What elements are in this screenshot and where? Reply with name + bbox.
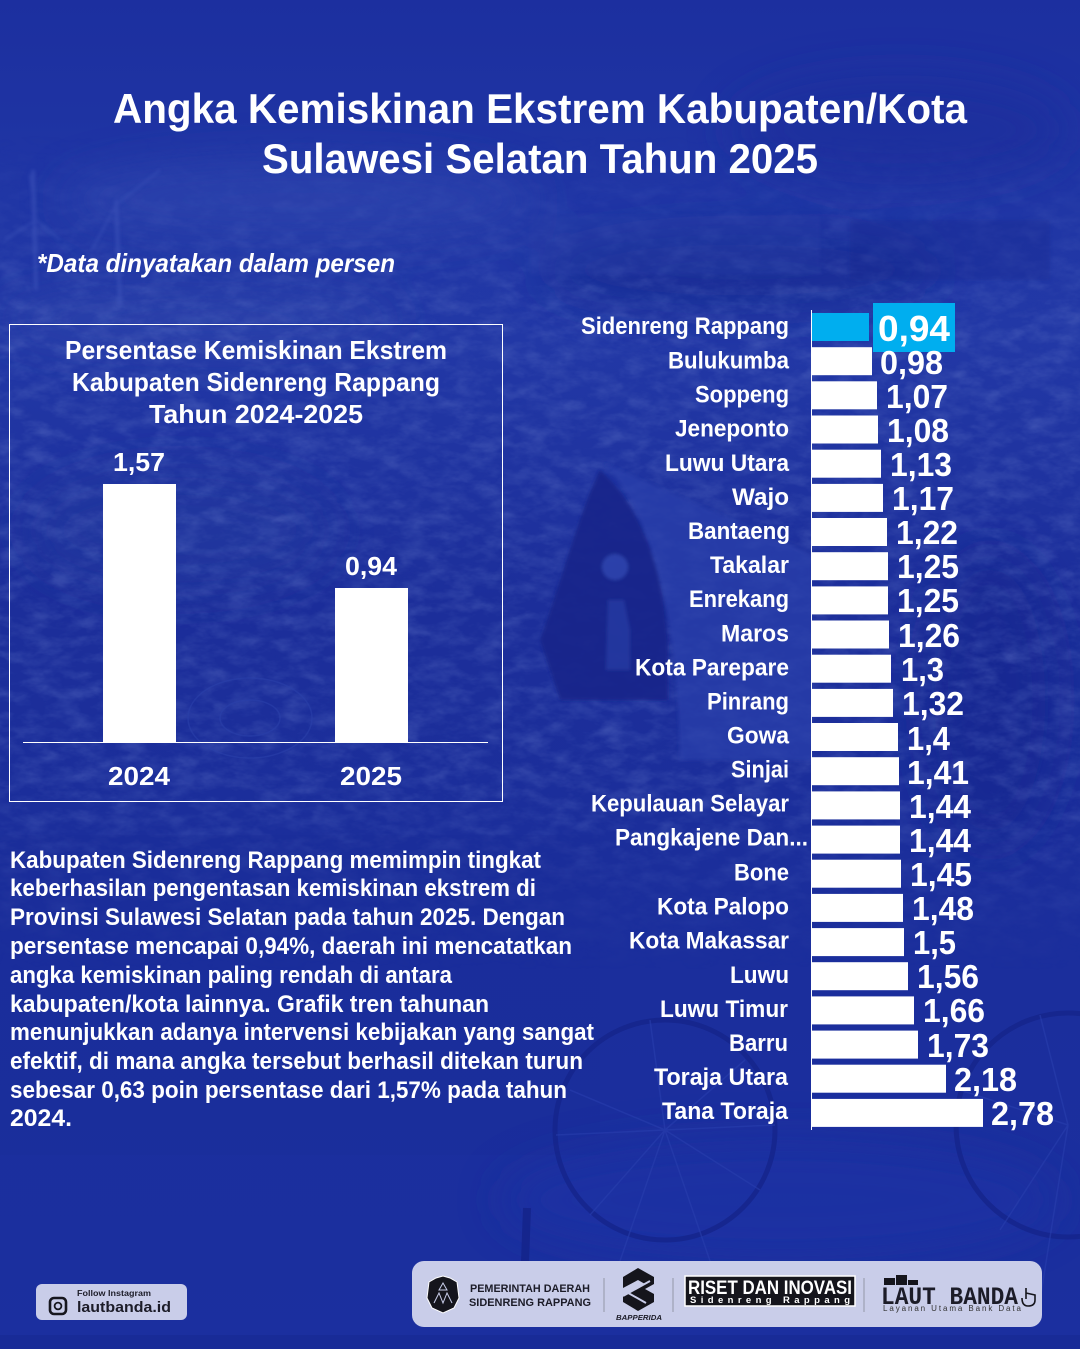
row: Gowa (727, 720, 951, 757)
logo: Pemerintah Daerah (427, 1276, 591, 1313)
bar 2024: 2024 (108, 761, 171, 791)
partner logos strip (412, 1261, 1042, 1327)
instagram badge: Follow Instagram (77, 1289, 151, 1298)
row: Luwu Utara (665, 446, 952, 483)
row: Takalar: Takalar (710, 552, 789, 579)
row: Sinjai (731, 754, 969, 791)
row: Kota Parepare: Kota Parepare (635, 654, 789, 682)
title: Sulawesi Selatan Tahun 2025 (262, 135, 818, 182)
row: Bulukumba (668, 344, 943, 381)
bar 2025: 0,94 (345, 551, 398, 581)
row: Wajo (732, 480, 954, 517)
chart heading (65, 335, 447, 429)
bar 2025: 2025 (340, 761, 402, 791)
row: Bantaeng: 1,22 (896, 514, 958, 551)
logo: Bapperida: BAPPERIDA (616, 1315, 662, 1322)
paragraph: Kabupaten Sidenreng Rappang memimpin tingkat (10, 847, 541, 874)
title (113, 85, 968, 182)
row: Kota Palopo (657, 890, 974, 927)
logo: Riset dan Inovasi: RISET DAN INOVASI (688, 1278, 852, 1299)
row: Maros (721, 617, 960, 654)
logo: Riset dan Inovasi (685, 1276, 855, 1306)
row: Bone (734, 856, 972, 893)
bar 2024: 1,57 (113, 447, 165, 477)
chart heading: Kabupaten Sidenreng Rappang (72, 367, 440, 397)
row: Takalar (710, 548, 959, 585)
row: Luwu Timur: Luwu Timur (660, 996, 788, 1023)
row: Pangkajene Dan Kepulauan: 1,44 (909, 822, 972, 859)
row: Bantaeng: Bantaeng (688, 518, 790, 545)
row: Takalar: 1,25 (897, 548, 959, 585)
row: Jeneponto: Jeneponto (675, 416, 789, 442)
row: Sidenreng Rappang: 0,94 (878, 308, 950, 349)
row: Kepulauan Selayar: Kepulauan Selayar (591, 790, 789, 818)
row: Kota Makassar (629, 924, 956, 961)
row: Sinjai: Sinjai (731, 756, 789, 784)
logo: Laut Banda: Layanan Utama Bank Data (883, 1304, 1022, 1313)
paragraph: angka kemiskinan paling rendah di antara (10, 962, 453, 989)
icon: pointing hand (1022, 1288, 1035, 1306)
paragraph: menunjukkan adanya intervensi kebijakan yang sangat (10, 1019, 594, 1046)
row: Kota Palopo: Kota Palopo (657, 894, 789, 920)
paragraph: keberhasilan pengentasan kemiskinan ekstrem di (10, 875, 536, 902)
row: Maros: Maros (721, 620, 789, 648)
row: Kota Palopo: 1,48 (912, 890, 974, 927)
row: Luwu Timur: 1,66 (923, 992, 985, 1029)
row: Tana Toraja (662, 1095, 1054, 1132)
logo: Laut Banda: LAUT BANDA (881, 1283, 1018, 1312)
panel: Sidenreng Rappang trend chart (10, 324, 502, 802)
row: Toraja Utara: Toraja Utara (654, 1064, 789, 1091)
row: Enrekang: 1,25 (897, 582, 959, 619)
paragraph (10, 847, 594, 1132)
logo: Riset dan Inovasi: Sidenreng Rappang (690, 1295, 850, 1306)
row: Soppeng: 1,07 (886, 378, 948, 415)
row: Gowa: 1,4 (907, 720, 951, 757)
row: Soppeng: Soppeng (695, 382, 789, 408)
row: Kota Makassar: Kota Makassar (629, 928, 789, 954)
row: Kota Makassar: 1,5 (913, 924, 956, 961)
chart heading: Tahun 2024-2025 (149, 399, 363, 429)
row: Pinrang: Pinrang (707, 688, 789, 716)
row: Luwu Timur (660, 992, 985, 1029)
bar 2024 (103, 447, 176, 791)
row: Luwu: 1,56 (917, 958, 979, 995)
logo: Bapperida (616, 1268, 662, 1322)
row: Tana Toraja: Tana Toraja (662, 1098, 789, 1125)
row: Barru: Barru (729, 1030, 788, 1057)
row: Gowa: Gowa (727, 722, 790, 750)
row: Kota Parepare: 1,3 (901, 651, 944, 688)
row: Pinrang: 1,32 (902, 685, 964, 722)
data unit note: *Data dinyatakan dalam persen (37, 248, 395, 278)
row: Kota Parepare (635, 651, 944, 688)
paragraph: persentase mencapai 0,94%, daerah ini mencatatkan (10, 933, 572, 960)
row: Bulukumba: 0,98 (880, 344, 943, 381)
row: Pangkajene Dan Kepulauan (615, 822, 972, 859)
row: Pinrang (707, 685, 964, 722)
row: Pangkajene Dan Kepulauan: Pangkajene Dan... (615, 824, 808, 852)
row: Tana Toraja: 2,78 (991, 1095, 1054, 1132)
row: Sidenreng Rappang: Sidenreng Rappang (581, 313, 789, 340)
row: Jeneponto: 1,08 (887, 412, 949, 449)
row: Soppeng (695, 378, 948, 415)
row: Luwu: Luwu (730, 962, 789, 989)
paragraph: efektif, di mana angka tersebut berhasil ditekan turun (10, 1048, 583, 1075)
paragraph: Provinsi Sulawesi Selatan pada tahun 2025. Dengan (10, 904, 565, 931)
row: Luwu Utara: Luwu Utara (665, 450, 790, 477)
paragraph: kabupaten/kota lainnya. Grafik tren tahunan (10, 991, 489, 1018)
instagram badge (36, 1284, 187, 1320)
instagram badge: lautbanda.id (77, 1299, 171, 1316)
icon: instagram (50, 1298, 66, 1314)
row: Jeneponto (675, 412, 949, 449)
row: Wajo: Wajo (732, 484, 789, 511)
row: Sidenreng Rappang (581, 303, 955, 352)
church building (540, 463, 812, 760)
row: Luwu (730, 958, 979, 995)
row: Bantaeng (688, 514, 958, 551)
row: Toraja Utara (654, 1061, 1017, 1098)
row: Sinjai: 1,41 (907, 754, 969, 791)
row: Maros: 1,26 (898, 617, 960, 654)
logo: Pemerintah Daerah: SIDENRENG RAPPANG (469, 1297, 591, 1309)
chart heading: Persentase Kemiskinan Ekstrem (65, 335, 447, 365)
row: Kepulauan Selayar: 1,44 (909, 788, 972, 825)
row: Barru: 1,73 (927, 1027, 989, 1064)
title: Angka Kemiskinan Ekstrem Kabupaten/Kota (113, 85, 968, 132)
row: Bone: 1,45 (910, 856, 972, 893)
row: Wajo: 1,17 (892, 480, 954, 517)
row: Toraja Utara: 2,18 (954, 1061, 1017, 1098)
row: Enrekang (689, 582, 959, 619)
bar 2025 (335, 551, 408, 791)
row: Barru (729, 1027, 989, 1064)
logo: Pemerintah Daerah: PEMERINTAH DAERAH (470, 1283, 590, 1295)
row: Kepulauan Selayar (591, 788, 972, 825)
row: Luwu Utara: 1,13 (890, 446, 952, 483)
paragraph: 2024. (10, 1105, 72, 1132)
row: Bone: Bone (734, 860, 789, 886)
row: Enrekang: Enrekang (689, 586, 789, 613)
row: Bulukumba: Bulukumba (668, 348, 790, 374)
ranking bar chart (581, 303, 1054, 1132)
paragraph: sebesar 0,63 poin persentase dari 1,57% pada tahun (10, 1077, 567, 1104)
